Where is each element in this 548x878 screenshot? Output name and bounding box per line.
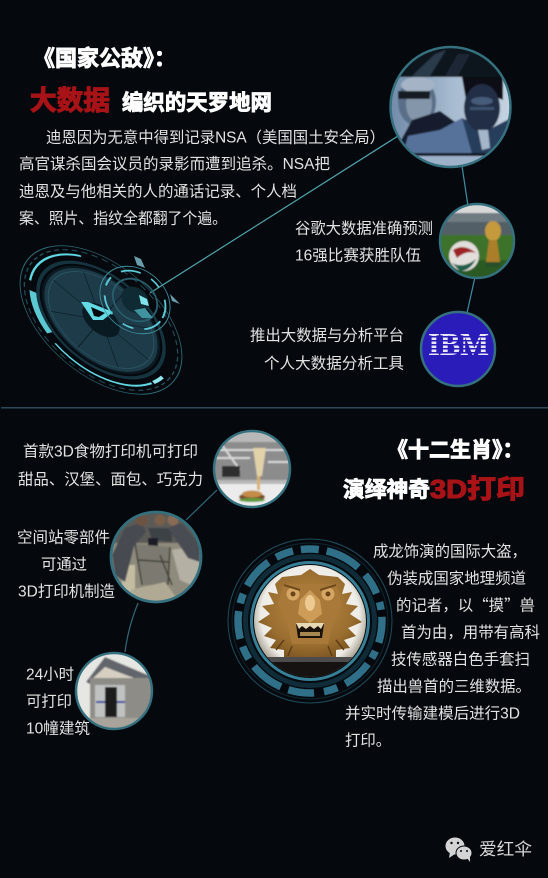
text: 3D food printer: 甜品、汉堡、面包、巧克力 [18, 470, 203, 488]
heading: big data [30, 86, 272, 116]
text block: CZ12 story: 伪装成国家地理频道 [387, 570, 526, 588]
text block: CZ12 story: 打印。 [345, 732, 391, 750]
connector lines: big data section [150, 136, 475, 313]
heading: big data: 大数据 [30, 86, 110, 116]
dragon head medallion [228, 539, 392, 703]
heading: 3D printing: 3D打印 [430, 474, 525, 504]
text block: story of NSA: 迪恩及与他相关的人的通话记录、个人档 [19, 182, 297, 200]
icon: IBM logo: IBM [428, 326, 489, 362]
text: Google prediction [295, 220, 433, 264]
text: space station [17, 528, 115, 600]
title: Chinese Zodiac: 《十二生肖》： [387, 439, 524, 462]
heading: 3D printing: 演绎神奇 [343, 478, 430, 502]
HUD disc graphic [0, 217, 209, 423]
text block: CZ12 story: 技传感器白色手套扫 [391, 650, 530, 668]
heading: big data: 编织的天罗地网 [122, 91, 272, 115]
section divider [1, 407, 548, 408]
text: 3D food printer: 首款3D食物打印机可打印 [23, 442, 198, 460]
text: space station: 3D打印机制造 [18, 582, 115, 600]
text block: CZ12 story: 描出兽首的三维数据。 [377, 678, 531, 696]
text: printed houses: 可打印 [26, 692, 72, 710]
text: space station: 可通过 [41, 556, 87, 574]
text: Google prediction: 谷歌大数据准确预测 [295, 220, 433, 238]
text: printed houses: 24小时 [26, 666, 74, 684]
text: IBM platform: 推出大数据与分析平台 [250, 326, 404, 344]
connector lines: 3D printing section [125, 490, 217, 652]
photo circle: football and trophy [438, 202, 516, 281]
text block: CZ12 story: 的记者，以“摸”兽 [396, 594, 535, 616]
text: printed houses [26, 666, 90, 738]
icon: IBM logo [421, 312, 495, 386]
text block: story of NSA: 案、照片、指纹全都翻了个遍。 [19, 210, 227, 228]
text block: story of NSA: 迪恩因为无意中得到记录NSA（美国国土安全局） [46, 128, 385, 146]
text: IBM platform: 个人大数据分析工具 [264, 354, 404, 372]
text: IBM platform [250, 326, 404, 372]
photo circle: food printer [213, 430, 291, 509]
text block: story of NSA [19, 128, 385, 228]
icon: WeChat [446, 838, 472, 862]
text: 3D food printer [18, 442, 203, 488]
footer: account name: 爱红伞 [479, 840, 532, 859]
title: National Enemy: 《国家公敌》： [33, 46, 176, 71]
text block: CZ12 story: 首为由，用带有高科 [401, 624, 540, 642]
text block: CZ12 story [345, 542, 540, 750]
text: Google prediction: 16强比赛获胜队伍 [295, 246, 421, 264]
text: printed houses: 10幢建筑 [26, 720, 90, 738]
photo circle: astronauts [110, 511, 202, 605]
text block: story of NSA: 高官谋杀国会议员的录影而遭到追杀。NSA把 [19, 155, 330, 173]
text: space station: 空间站零部件 [17, 528, 110, 546]
text block: CZ12 story: 并实时传输建模后进行3D [345, 704, 520, 722]
photo circle: movie stills [389, 46, 512, 168]
heading: 3D printing [343, 474, 525, 504]
text block: CZ12 story: 成龙饰演的国际大盗， [373, 542, 527, 560]
photo circle: printed house [75, 652, 153, 730]
